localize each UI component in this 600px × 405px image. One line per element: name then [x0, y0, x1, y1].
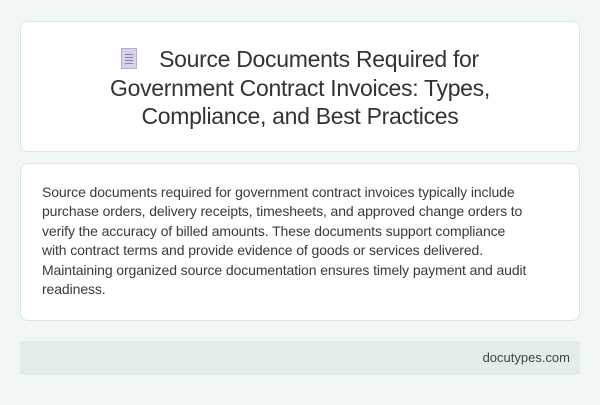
body text card: [20, 163, 580, 321]
title: Source Documents Required for: [159, 46, 479, 72]
footer source: docutypes.com: [483, 350, 570, 365]
title: Compliance, and Best Practices: [142, 103, 458, 129]
description text: readiness.: [42, 281, 106, 297]
description text: verify the accuracy of billed amounts. These documents support compliance: [42, 223, 505, 239]
description text: with contract terms and provide evidence of goods or services delivered.: [42, 242, 483, 258]
footer bar: [20, 341, 580, 375]
description text: Maintaining organized source documentation ensures timely payment and audit: [42, 262, 526, 278]
description text: Source documents required for government contract invoices typically include: [42, 184, 515, 200]
title: Government Contract Invoices: Types,: [110, 74, 490, 100]
description text: [42, 184, 526, 297]
title: [110, 46, 490, 129]
description text: purchase orders, delivery receipts, timesheets, and approved change orders to: [42, 203, 522, 219]
header card: [20, 21, 580, 152]
icon: document: [121, 48, 137, 69]
